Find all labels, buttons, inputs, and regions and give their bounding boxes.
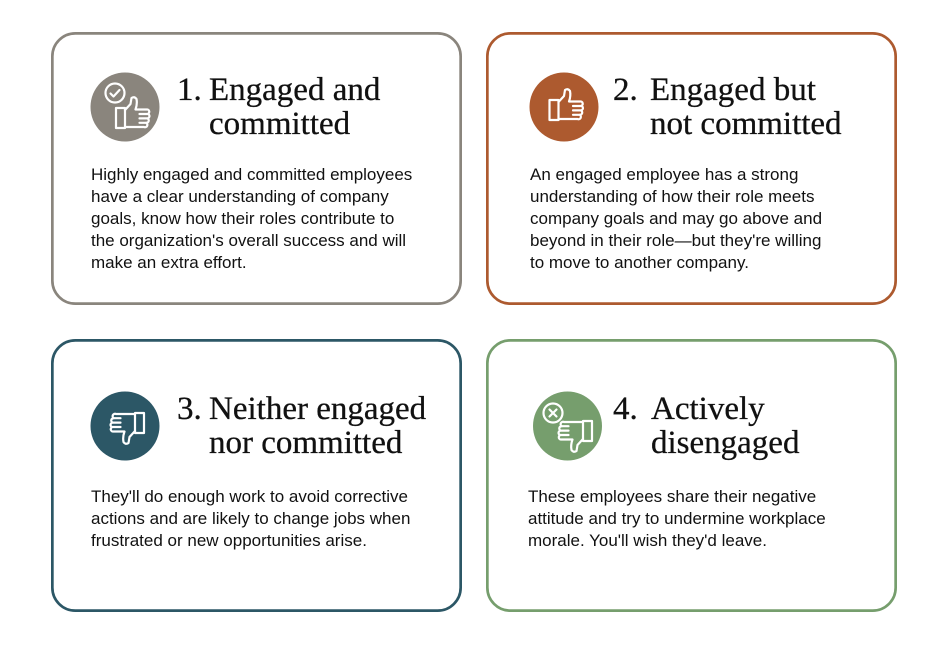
heading: engaged and committed: Engaged and: [209, 72, 380, 108]
heading: neither engaged nor committed: nor committed: [209, 425, 402, 461]
text: card 2 body: An engaged employee has a strong: [530, 165, 798, 184]
text: card 3 body: frustrated or new opportunities arise.: [91, 531, 367, 550]
panel: 1 engaged and committed: [51, 32, 462, 305]
panel: 3 neither engaged nor committed: [51, 339, 462, 612]
heading: actively disengaged: Actively: [651, 391, 765, 427]
text: card 2 body: company goals and may go above and: [530, 209, 822, 228]
heading: actively disengaged: disengaged: [651, 425, 799, 461]
heading: engaged but not committed: [650, 72, 842, 142]
heading: 3: 3.: [177, 391, 202, 427]
heading: engaged but not committed: not committed: [650, 106, 842, 142]
icon: thumbs down with x: [533, 392, 602, 460]
text: card 1 body: goals, know how their roles contribute to: [91, 209, 394, 228]
icon: thumbs up with check: [90, 72, 160, 142]
heading: engaged and committed: committed: [209, 106, 350, 142]
heading: engaged and committed: [209, 72, 380, 142]
text: card 1 body: make an extra effort.: [91, 253, 247, 272]
heading: 1: 1.: [177, 72, 202, 108]
text: card 1 body: the organization's overall success and will: [91, 231, 406, 250]
text: card 1 body: Highly engaged and committed employees: [91, 165, 412, 184]
text: card 3 body: [91, 487, 410, 550]
text: card 1 body: have a clear understanding of company: [91, 187, 389, 206]
text: card 4 body: These employees share their negative: [528, 487, 816, 506]
panel: 2 engaged but not committed: [486, 32, 897, 305]
text: card 2 body: [530, 165, 822, 272]
panel: 4 actively disengaged: [486, 339, 897, 612]
icon: thumbs down: [90, 392, 160, 460]
heading: 4: 4.: [613, 391, 638, 427]
text: card 2 body: to move to another company.: [530, 253, 749, 272]
text: card 4 body: [528, 487, 826, 550]
text: card 1 body: [91, 165, 412, 272]
text: card 2 body: understanding of how their role meets: [530, 187, 814, 206]
heading: neither engaged nor committed: [209, 391, 426, 461]
heading: engaged but not committed: Engaged but: [650, 72, 816, 108]
heading: actively disengaged: [651, 391, 800, 461]
text: card 4 body: attitude and try to undermine workplace: [528, 509, 826, 528]
text: card 3 body: actions and are likely to change jobs when: [91, 509, 410, 528]
text: card 4 body: morale. You'll wish they'd leave.: [528, 531, 767, 550]
text: card 2 body: beyond in their role—but they're willing: [530, 231, 821, 250]
heading: neither engaged nor committed: Neither engaged: [209, 391, 426, 427]
icon: thumbs up: [530, 72, 598, 142]
text: card 3 body: They'll do enough work to avoid corrective: [91, 487, 408, 506]
heading: 2: 2.: [613, 72, 638, 108]
